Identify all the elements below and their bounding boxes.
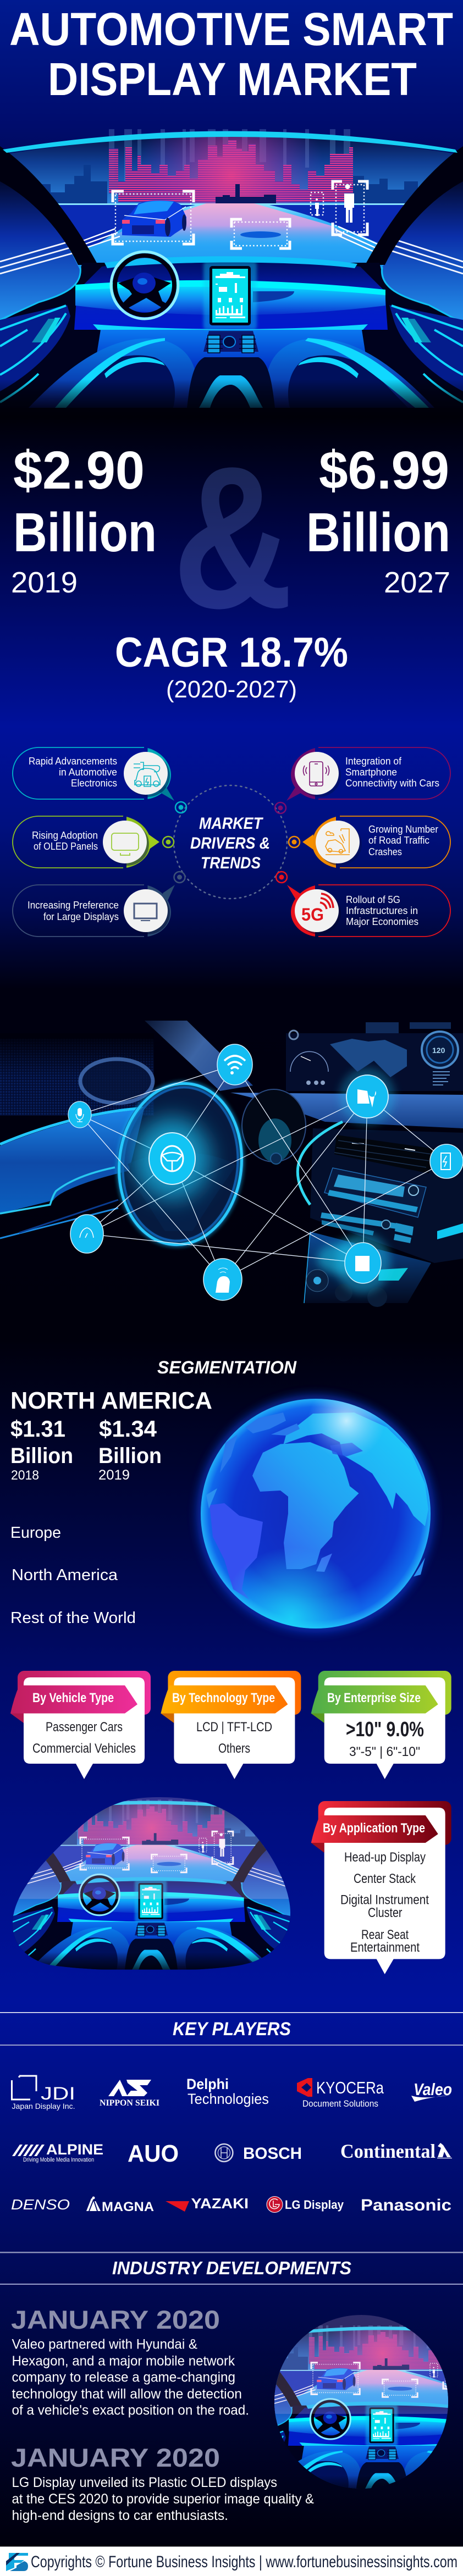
callout: by enterprise size: >10" 9.0%: [346, 1718, 424, 1741]
logo: Magna: MAGNA: [102, 2200, 154, 2214]
node: steering wheel: [149, 1133, 195, 1184]
HUD: speedometer, map and gauge: 120: [432, 1046, 445, 1055]
region list: Rest of the World: [10, 1609, 136, 1627]
driver: smartphone connectivity: Smartphone: [345, 767, 397, 778]
logo: LG Display: LG Display: [285, 2198, 344, 2212]
text block: January 2020 LG Display: high-end designs to car enthusiasts.: [12, 2508, 228, 2523]
callout: by application type: By Application Type: [323, 1821, 425, 1836]
callout: by application type: Entertainment: [350, 1940, 420, 1955]
driver: rising adoption of OLED: Rising Adoption: [32, 830, 98, 841]
region list: North America: [12, 1566, 118, 1584]
text block: January 2020 Valeo: [11, 2305, 249, 2418]
callout: by application type: Head-up Display: [344, 1850, 426, 1865]
driver: road traffic crashes: Growing Number: [368, 824, 438, 835]
stat 2019: $2.90: [13, 440, 145, 500]
driver: 5G rollout: [276, 872, 450, 937]
logo: Kyocera: Document Solutions: [302, 2098, 378, 2109]
logo: JDI: Japan Display Inc.: [12, 2102, 75, 2110]
panel: market drivers and trends: [13, 747, 450, 937]
text block: January 2020 LG Display: at the CES 2020 to provide superior image quality &: [12, 2491, 314, 2507]
stat: North America 2018: [10, 1416, 73, 1483]
logo: AUO: AUO: [128, 2140, 179, 2167]
CAGR: (2020-2027): [166, 676, 297, 703]
text block: January 2020 Valeo: Valeo partnered with Hyundai &: [12, 2337, 197, 2352]
logo: Denso: DENSO: [11, 2196, 70, 2213]
icon: Fortune Business Insights logo: [6, 2553, 28, 2571]
driver: large displays: for Large Displays: [43, 911, 119, 922]
callout: by application type: Center Stack: [354, 1871, 416, 1886]
stat 2019: 2019: [11, 566, 78, 599]
stat 2027: $6.99: [319, 440, 449, 500]
stat: North America 2019: $1.34: [99, 1416, 157, 1442]
node: car: [203, 1259, 242, 1300]
logo: Yazaki: YAZAKI: [191, 2195, 249, 2212]
callout: by technology type: LCD | TFT-LCD: [196, 1720, 272, 1735]
logo: Delphi Technologies: [186, 2076, 269, 2107]
section header: industry developments: INDUSTRY DEVELOPMENTS: [112, 2258, 351, 2278]
title: [9, 3, 453, 105]
callout: by technology type: Others: [218, 1741, 250, 1756]
logo: Valeo: Valeo: [414, 2080, 452, 2099]
illustration: circular car interior: [274, 2315, 448, 2489]
panel: regional stats: NORTH AMERICA: [10, 1387, 212, 1414]
driver: smartphone connectivity: [275, 747, 450, 813]
CAGR: CAGR 18.7%: [115, 629, 348, 676]
icon: smartphone: [304, 762, 329, 786]
driver: rapid advancements: in Automotive: [59, 767, 117, 778]
node: map pin: [346, 1075, 388, 1118]
text block: January 2020 LG Display: [11, 2443, 314, 2523]
logo: Panasonic: Panasonic: [361, 2196, 451, 2214]
logo: Kyocera: [297, 2078, 384, 2109]
panel: regional stats: [10, 1387, 212, 1627]
illustration: futuristic car interior with HUD: [0, 129, 463, 408]
region list: [10, 1524, 136, 1627]
steering wheel: [109, 1075, 252, 1253]
stat: North America 2019: 2019: [98, 1467, 130, 1483]
logo: Magna: [86, 2196, 154, 2214]
logo: Alpine: Driving Mobile Media Innovation: [23, 2157, 94, 2163]
node: microphone: [68, 1101, 91, 1128]
driver: large displays: [13, 872, 185, 937]
driver: rising adoption of OLED: [13, 816, 174, 868]
heading: market drivers: [190, 815, 270, 872]
icon: 5G signal: 5G: [301, 905, 324, 924]
callout: by enterprise size: By Enterprise Size: [327, 1691, 421, 1705]
node: gauge: [70, 1215, 103, 1253]
callout: by application type: Rear Seat: [361, 1927, 409, 1942]
callout: by vehicle type: [10, 1671, 151, 1779]
logo: Bosch: [215, 2144, 302, 2163]
stat: North America 2018: Billion: [10, 1444, 73, 1468]
heading: market drivers: TRENDS: [201, 854, 261, 872]
icon: OLED panel: [112, 833, 139, 855]
logo: Delphi Technologies: Delphi: [186, 2076, 229, 2092]
driver: rapid advancements: [13, 747, 186, 813]
stat: North America 2019: [98, 1416, 162, 1483]
callout: by technology type: [161, 1671, 301, 1779]
logo: LG Display: [267, 2196, 344, 2213]
logo: Alpine: ALPINE: [46, 2141, 103, 2158]
text block: January 2020 Valeo: JANUARY 2020: [11, 2305, 220, 2334]
driver: 5G rollout: Major Economies: [346, 916, 418, 927]
text block: January 2020 LG Display: JANUARY 2020: [11, 2443, 220, 2472]
stat 2027: [306, 440, 450, 599]
globe: [196, 1394, 435, 1633]
node: wifi: [217, 1044, 252, 1085]
logo: Bosch: BOSCH: [243, 2145, 302, 2163]
callout: by application type: Cluster: [368, 1905, 403, 1920]
CAGR: [115, 629, 348, 703]
logo: Alpine: [12, 2141, 103, 2163]
callout: by enterprise size: 3"-5" | 6"-10": [349, 1744, 420, 1759]
callout: by vehicle type: By Vehicle Type: [32, 1691, 114, 1705]
stats: market size: [11, 424, 450, 703]
logo: JDI: JDI: [41, 2084, 75, 2103]
driver: 5G rollout: Infrastructures in: [346, 905, 418, 916]
stat 2027: 2027: [384, 566, 450, 599]
callout: by application type: [311, 1801, 451, 1974]
stat: North America 2019: Billion: [98, 1444, 162, 1468]
driver: large displays: Increasing Preference: [27, 900, 119, 911]
stat 2019: Billion: [13, 502, 157, 563]
driver: 5G rollout: Rollout of 5G: [346, 894, 400, 905]
heading: segmentation: SEGMENTATION: [157, 1358, 297, 1377]
logo: Delphi Technologies: Technologies: [188, 2091, 269, 2107]
text block: January 2020 Valeo: technology that will allow the detection: [12, 2386, 242, 2402]
driver: rapid advancements: Rapid Advancements: [29, 756, 117, 767]
heading: market drivers: DRIVERS &: [190, 834, 270, 852]
icon: car crash: [326, 829, 350, 855]
logo: Yazaki: [166, 2195, 249, 2212]
logo: JDI: [12, 2076, 75, 2110]
title: DISPLAY MARKET: [48, 53, 417, 105]
stat: North America 2018: 2018: [11, 1468, 39, 1483]
HUD: speedometer, map and gauge: [289, 1022, 458, 1085]
driver: road traffic crashes: Crashes: [368, 846, 402, 857]
photo: connected car dashboard with network nodes: [0, 1021, 463, 1307]
driver: road traffic crashes: [289, 816, 450, 868]
logo: Continental: Continental: [340, 2140, 436, 2162]
callout: by application type: Digital Instrument: [340, 1893, 429, 1907]
callout: by vehicle type: Passenger Cars: [46, 1720, 123, 1735]
driver: smartphone connectivity: Integration of: [345, 756, 402, 767]
heading: market drivers: MARKET: [199, 815, 263, 833]
stat 2019: [11, 440, 157, 599]
logo: Kyocera: KYOCERa: [316, 2078, 384, 2097]
callout: by enterprise size: [311, 1671, 451, 1779]
callout: by technology type: By Technology Type: [172, 1691, 275, 1705]
logo: Nippon Seiki: NIPPON SEIKI: [100, 2098, 159, 2108]
text block: January 2020 LG Display: LG Display unveiled its Plastic OLED displays: [12, 2475, 277, 2490]
icon: 5G signal: [301, 894, 333, 924]
stat: North America 2018: $1.31: [10, 1416, 65, 1442]
driver: rising adoption of OLED: of OLED Panels: [34, 841, 98, 852]
node: chip: [345, 1243, 381, 1283]
text block: January 2020 Valeo: of a vehicle's exact position on the road.: [12, 2403, 249, 2418]
callout: by vehicle type: Commercial Vehicles: [32, 1741, 136, 1756]
illustration: dome-cropped car interior: [11, 1797, 291, 1970]
driver: rapid advancements: Electronics: [71, 778, 117, 789]
driver: smartphone connectivity: Connectivity with Cars: [345, 778, 439, 789]
node: battery: [430, 1144, 463, 1178]
logo: Nippon Seiki: [100, 2080, 159, 2108]
region list: Europe: [10, 1524, 61, 1542]
logos: key players: [11, 2076, 452, 2214]
section header: key players: KEY PLAYERS: [173, 2019, 291, 2040]
text block: January 2020 Valeo: company to release a game-changing: [12, 2370, 235, 2385]
footer: [0, 2547, 463, 2576]
icon: monitor: [134, 904, 157, 921]
text block: January 2020 Valeo: Hexagon, and a major mobile network: [12, 2353, 235, 2369]
network lines: [80, 1065, 447, 1279]
icon: electric car: [134, 762, 160, 786]
ampersand watermark: &: [173, 424, 293, 650]
driver: road traffic crashes: of Road Traffic: [368, 835, 429, 846]
